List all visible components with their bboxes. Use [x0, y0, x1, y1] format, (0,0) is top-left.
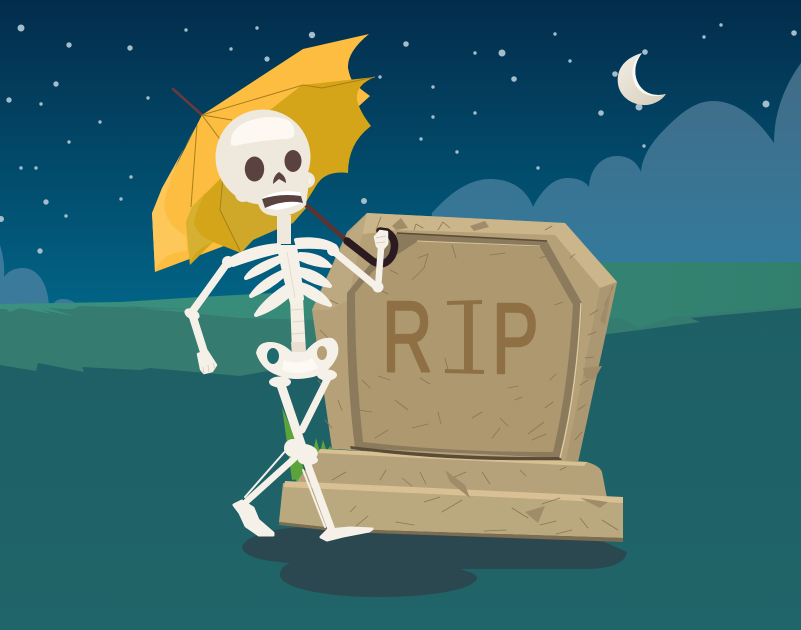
night sky	[0, 0, 801, 330]
umbrella shaft	[305, 204, 347, 241]
skull	[216, 110, 315, 216]
tombstone body	[312, 213, 617, 462]
stone worn patches	[392, 218, 612, 523]
tombstone	[279, 213, 623, 542]
middle grass layer	[0, 305, 801, 400]
eye sockets and nose	[245, 150, 302, 184]
rib cage	[231, 239, 335, 315]
umbrella front dark panel	[186, 77, 375, 265]
RIP carved lettering	[382, 281, 539, 395]
umbrella tip	[173, 89, 202, 115]
umbrella lower gold panel	[220, 177, 307, 253]
RIP carved lettering: I	[458, 281, 479, 393]
right arm and hand	[327, 231, 387, 292]
neck and spine	[277, 215, 306, 356]
clouds right	[432, 63, 801, 270]
back foot	[234, 501, 273, 535]
knee and hip joints	[269, 370, 337, 465]
tombstone lower base tier	[298, 449, 610, 510]
tombstone inner face	[355, 241, 573, 452]
umbrella left light panel	[152, 125, 197, 272]
RIP carved lettering: R	[382, 282, 433, 393]
crescent moon	[618, 53, 666, 105]
stone texture cracks	[318, 217, 618, 534]
back hill	[0, 262, 801, 400]
upper base tier	[279, 483, 623, 538]
umbrella handle	[347, 231, 395, 264]
tombstone light top bevel	[347, 213, 617, 288]
front foot	[321, 528, 372, 540]
skeleton	[183, 110, 395, 540]
legs	[245, 376, 331, 528]
RIP carved lettering: P	[492, 284, 539, 395]
sternum	[279, 247, 302, 303]
cranium and jaw	[216, 110, 310, 204]
stars	[0, 23, 797, 254]
teeth and mouth	[262, 191, 303, 210]
grass blades	[282, 407, 334, 482]
cheek bones	[235, 186, 251, 202]
RIP letter I serifs	[445, 302, 484, 372]
ground shadows	[242, 527, 627, 597]
umbrella ribs	[191, 77, 375, 253]
clouds left	[0, 245, 78, 306]
foreground ground	[0, 308, 801, 630]
pelvis	[256, 338, 338, 379]
umbrella back canopy	[152, 34, 370, 272]
tombstone inner frame	[347, 233, 582, 458]
cranium highlight	[231, 117, 294, 146]
umbrella	[152, 34, 375, 272]
left arm	[183, 256, 234, 374]
